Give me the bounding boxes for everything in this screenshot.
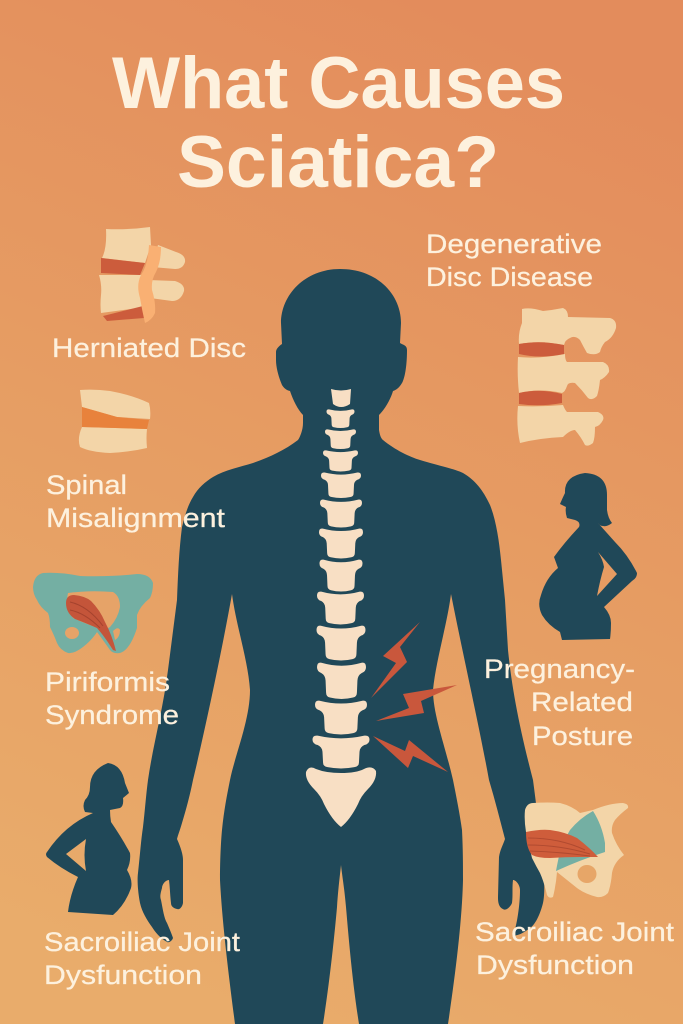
panel: degenerative disc disease <box>426 229 616 446</box>
panel: sacroiliac joint dysfunction right: Dysfunction <box>476 950 634 980</box>
panel: sacroiliac joint dysfunction left: Dysfunction <box>44 960 202 990</box>
panel: piriformis syndrome: Syndrome <box>45 700 179 730</box>
icon: degenerated vertebrae <box>517 308 616 446</box>
panel: pregnancy-related posture: Related <box>531 687 633 717</box>
icon: misaligned vertebrae <box>79 390 150 453</box>
sacrum <box>306 767 376 827</box>
panel: spinal misalignment: Misalignment <box>46 503 226 533</box>
icon: pelvis with muscle <box>525 802 628 898</box>
vertebra top <box>331 389 351 407</box>
label: Sacroiliac Joint <box>44 927 241 957</box>
label: Pregnancy- <box>484 654 635 684</box>
panel: degenerative disc disease: Disc Disease <box>426 262 593 292</box>
panel: pregnancy-related posture: Posture <box>532 721 633 751</box>
panel: spinal misalignment <box>46 390 226 533</box>
icon: pelvis with piriformis muscle <box>33 573 153 653</box>
spine <box>306 389 376 827</box>
panel: herniated disc <box>52 227 246 363</box>
icon: herniated disc <box>99 227 185 323</box>
icon: woman silhouette left <box>46 763 132 915</box>
panel: pregnancy-related posture <box>484 473 637 751</box>
label: Piriformis <box>45 667 170 697</box>
pain bolts <box>371 622 457 772</box>
label: Sacroiliac Joint <box>475 917 675 947</box>
panel: sacroiliac joint dysfunction left <box>44 763 241 990</box>
title: What Causes <box>112 43 565 124</box>
label: Spinal <box>46 470 127 500</box>
icon: pregnant woman silhouette <box>539 473 637 640</box>
panel: sacroiliac joint dysfunction right <box>475 802 675 980</box>
label: Herniated Disc <box>52 333 246 363</box>
label: Degenerative <box>426 229 602 259</box>
title <box>112 43 565 203</box>
panel: piriformis syndrome <box>33 573 179 730</box>
title: Sciatica? <box>177 122 499 203</box>
body silhouette <box>138 269 544 1024</box>
